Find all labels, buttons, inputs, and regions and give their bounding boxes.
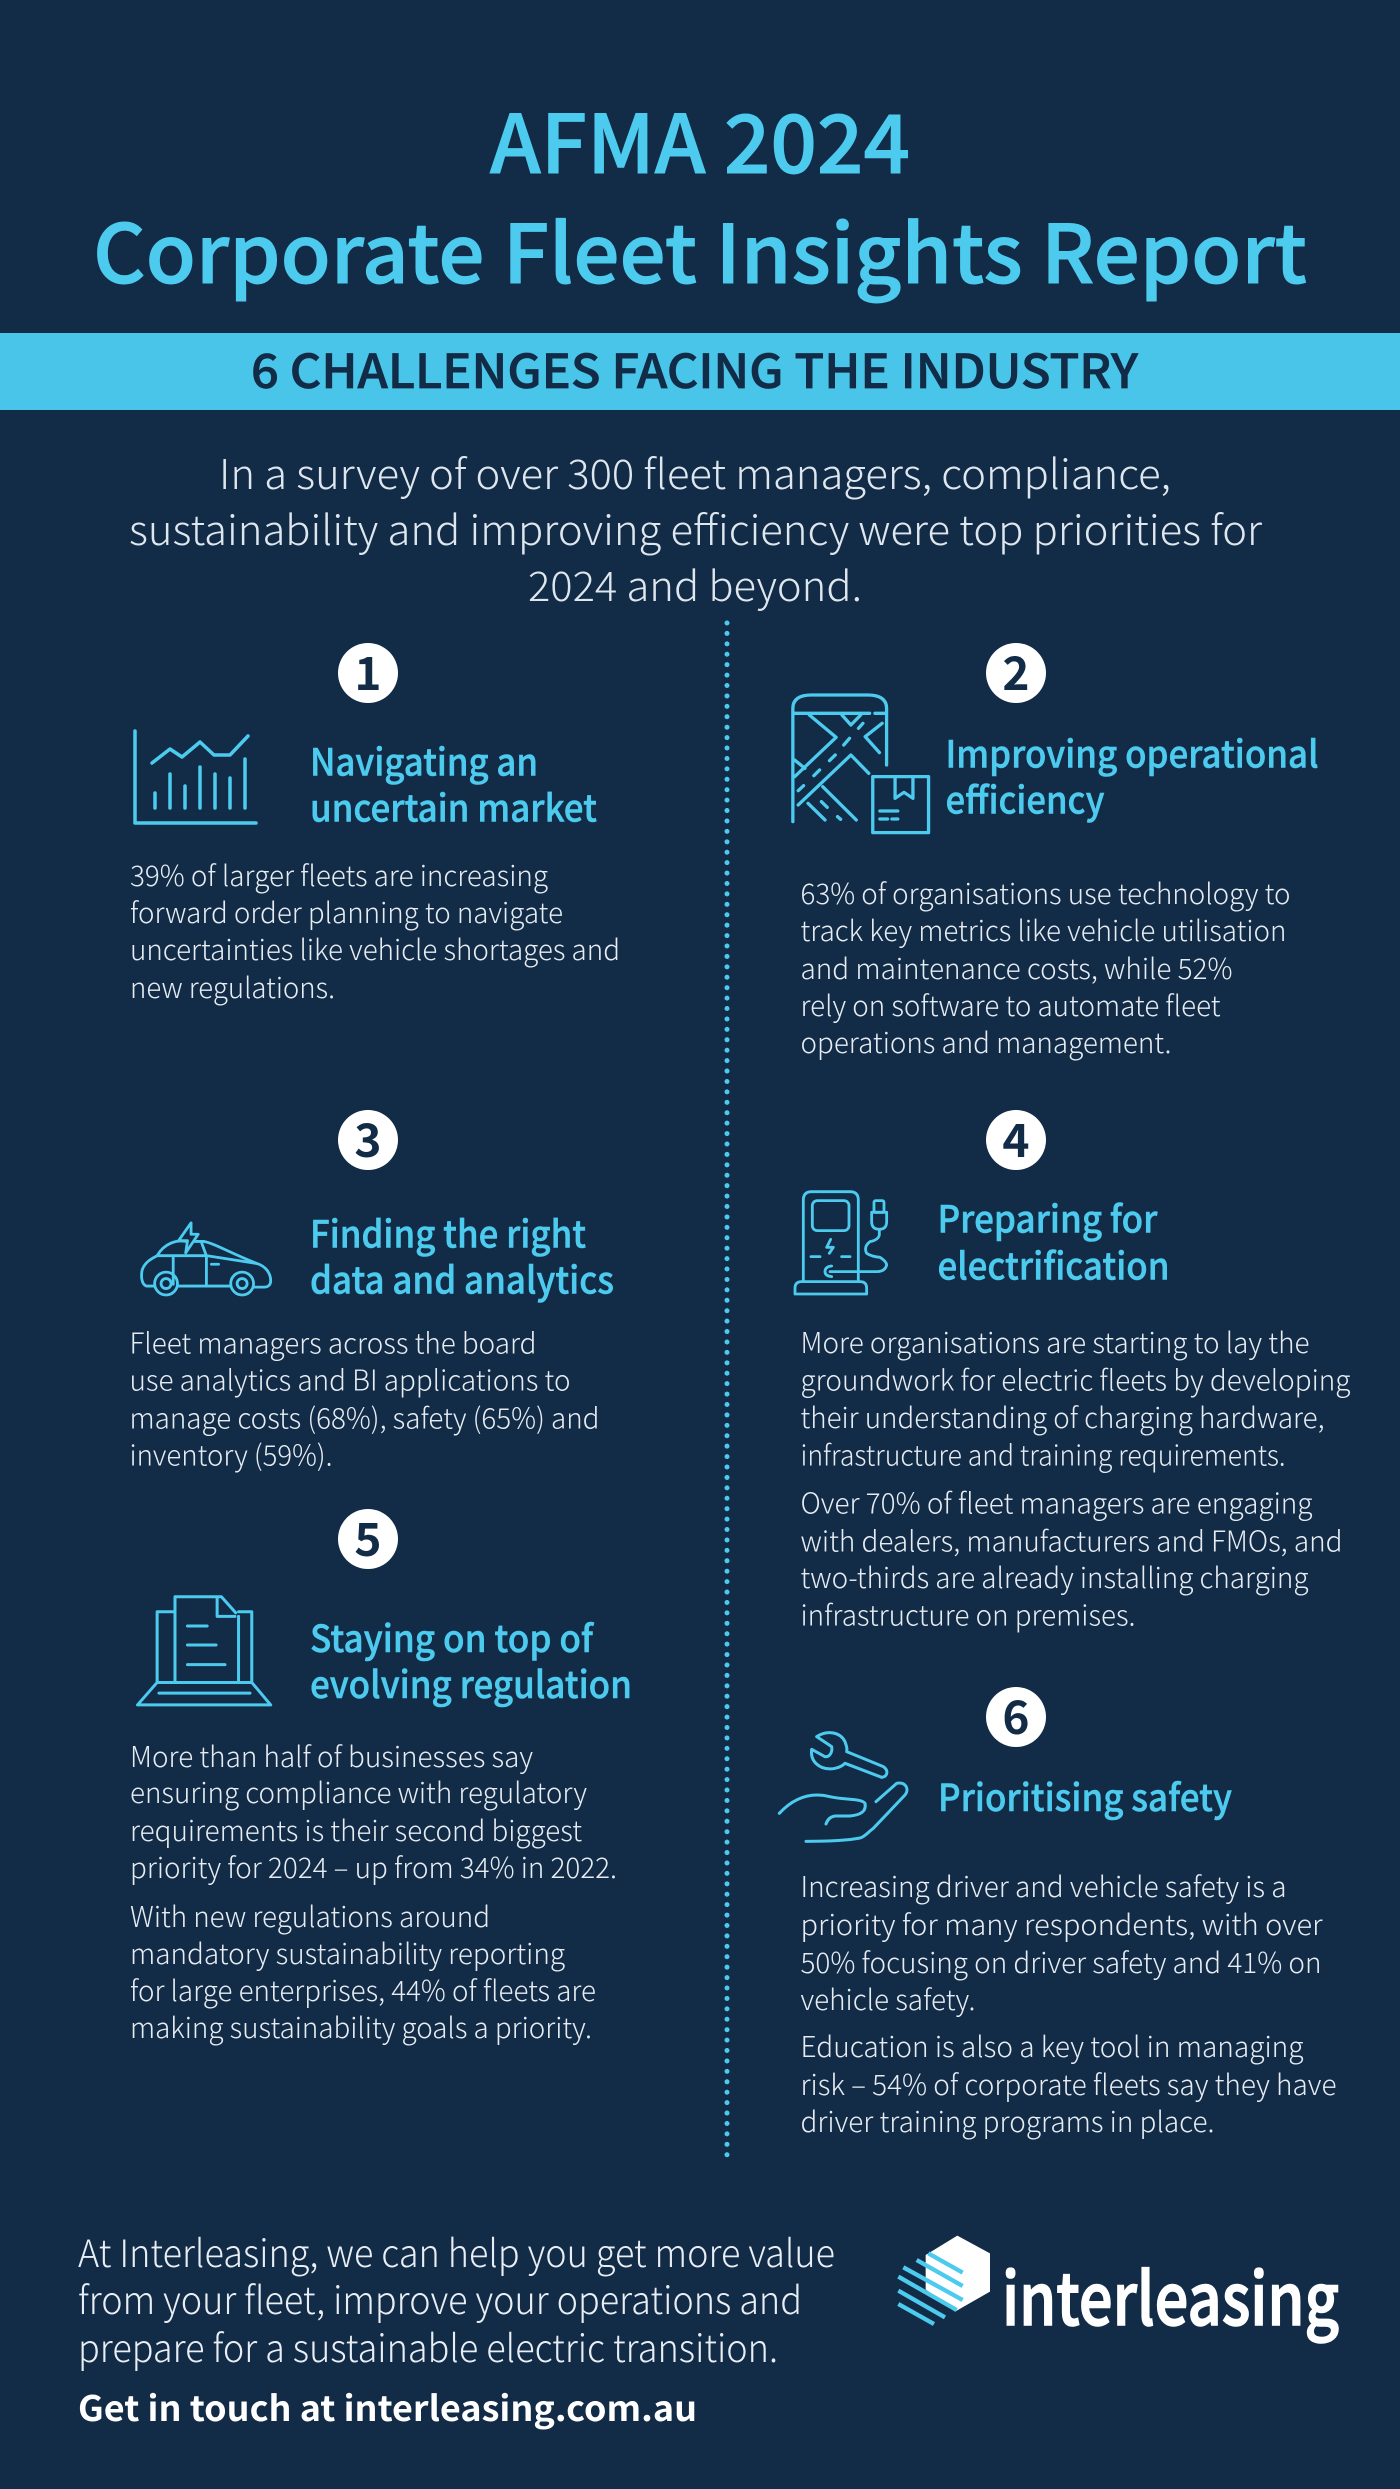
banner: 6 challenges: 6 CHALLENGES FACING THE INDUSTRY [251, 333, 1139, 402]
body text: priority for many respondents, with over [800, 1903, 1323, 1944]
icon: bar and line chart [135, 731, 256, 823]
heading [310, 1204, 614, 1304]
intro text [129, 441, 1262, 613]
heading: efficiency [946, 770, 1104, 824]
body text: 39% of larger fleets are increasing [130, 854, 548, 895]
body text: Increasing driver and vehicle safety is a [800, 1865, 1286, 1906]
panel: challenge 3 [130, 1105, 614, 1474]
footer call to action: At Interleasing, we can help you get more value [78, 2223, 835, 2278]
intro text: In a survey of over 300 fleet managers, compliance, [219, 441, 1171, 501]
body text: their understanding of charging hardware, [800, 1396, 1324, 1437]
panel: challenge 5 [130, 1504, 632, 2047]
intro text: 2024 and beyond. [528, 553, 862, 613]
intro text: sustainability and improving efficiency were top priorities for [129, 497, 1262, 557]
body text: 63% of organisations use technology to [800, 872, 1290, 913]
body text: Over 70% of fleet managers are engaging [800, 1482, 1313, 1522]
panel: challenge 6 [779, 1682, 1336, 2141]
body text: rely on software to automate fleet [800, 984, 1220, 1025]
number badge 3 [338, 1105, 398, 1171]
body text: use analytics and BI applications to [130, 1358, 570, 1400]
panel: challenge 4 [795, 1105, 1351, 1634]
number badge 4: 4 [1002, 1105, 1030, 1171]
body text: vehicle safety. [800, 1978, 976, 2019]
heading: Staying on top of [310, 1609, 594, 1663]
panel: challenge 1 [130, 638, 620, 1007]
icon: laptop with document [137, 1597, 271, 1705]
body text: track key metrics like vehicle utilisation [800, 909, 1286, 950]
heading: electrification [938, 1236, 1170, 1290]
number badge 5 [338, 1504, 398, 1570]
number badge 6 [986, 1682, 1046, 1748]
heading: Navigating an [310, 732, 538, 786]
body text: uncertainties like vehicle shortages and [130, 928, 620, 969]
body text [130, 854, 620, 1007]
body text: ensuring compliance with regulatory [130, 1771, 587, 1812]
body text: making sustainability goals a priority. [130, 2006, 592, 2047]
heading: data and analytics [310, 1250, 614, 1304]
logo: interleasing [898, 2236, 1339, 2346]
icon: phone map and parcel [793, 695, 929, 833]
number badge 1 [338, 638, 398, 704]
number badge 2: 2 [1002, 638, 1030, 704]
body text: two-thirds are already installing charging [800, 1556, 1309, 1597]
body text: forward order planning to navigate [130, 891, 563, 932]
body text [800, 1321, 1351, 1634]
logo wordmark: interleasing [1002, 2241, 1339, 2346]
body text: infrastructure on premises. [800, 1594, 1136, 1634]
icon: logo hexagon [898, 2236, 990, 2324]
panel: challenge 2 [793, 638, 1318, 1062]
number badge 6: 6 [1002, 1682, 1030, 1748]
heading: evolving regulation [310, 1655, 632, 1709]
body text: With new regulations around [130, 1895, 490, 1936]
footer call to action: from your fleet, improve your operations and [78, 2270, 802, 2325]
body text: inventory (59%). [130, 1434, 332, 1474]
body text: operations and management. [800, 1021, 1172, 1062]
heading [938, 1190, 1170, 1290]
heading [310, 732, 597, 832]
dotted column divider [724, 623, 730, 2158]
body text: and maintenance costs, while 52% [800, 947, 1232, 988]
icon: electric car [142, 1223, 271, 1295]
body text: 50% focusing on driver safety and 41% on [800, 1941, 1322, 1982]
body text: with dealers, manufacturers and FMOs, and [800, 1520, 1342, 1560]
number badge 5: 5 [354, 1504, 382, 1570]
body text [130, 1735, 617, 2047]
heading: Finding the right [310, 1204, 586, 1258]
footer call to action: Get in touch at interleasing.com.au [78, 2381, 697, 2432]
title [93, 80, 1307, 307]
title: AFMA 2024 [490, 80, 910, 197]
icon: hand and spanner [779, 1733, 907, 1841]
icon: EV charging station [795, 1192, 887, 1294]
number badge 4 [986, 1105, 1046, 1171]
heading [310, 1609, 632, 1709]
title: Corporate Fleet Insights Report [93, 190, 1307, 307]
body text [800, 872, 1290, 1062]
body text: More than half of businesses say [130, 1735, 533, 1776]
heading: uncertain market [310, 778, 597, 832]
number badge 2 [986, 638, 1046, 704]
body text: new regulations. [130, 966, 335, 1007]
body text: requirements is their second biggest [130, 1809, 582, 1850]
heading [946, 724, 1318, 824]
heading: Prioritising safety [938, 1768, 1232, 1822]
body text: groundwork for electric fleets by developing [800, 1358, 1351, 1400]
body text [130, 1322, 600, 1474]
number badge 3: 3 [354, 1105, 382, 1171]
footer call to action: prepare for a sustainable electric transition. [78, 2318, 778, 2373]
banner: 6 challenges [0, 333, 1400, 410]
body text: for large enterprises, 44% of fleets are [130, 1969, 596, 2010]
body text: More organisations are starting to lay the [800, 1321, 1310, 1362]
heading: Improving operational [946, 724, 1318, 778]
body text: priority for 2024 – up from 34% in 2022. [130, 1846, 617, 1887]
body text: risk – 54% of corporate fleets say they have [800, 2063, 1336, 2104]
footer call to action [78, 2223, 835, 2432]
body text: Education is also a key tool in managing [800, 2025, 1304, 2066]
body text: manage costs (68%), safety (65%) and [130, 1396, 600, 1438]
body text: driver training programs in place. [800, 2100, 1214, 2141]
body text: infrastructure and training requirements. [800, 1434, 1286, 1474]
heading: Preparing for [938, 1190, 1158, 1244]
body text: Fleet managers across the board [130, 1322, 536, 1362]
body text: mandatory sustainability reporting [130, 1932, 565, 1973]
number badge 1: 1 [354, 638, 382, 704]
body text [800, 1865, 1336, 2141]
